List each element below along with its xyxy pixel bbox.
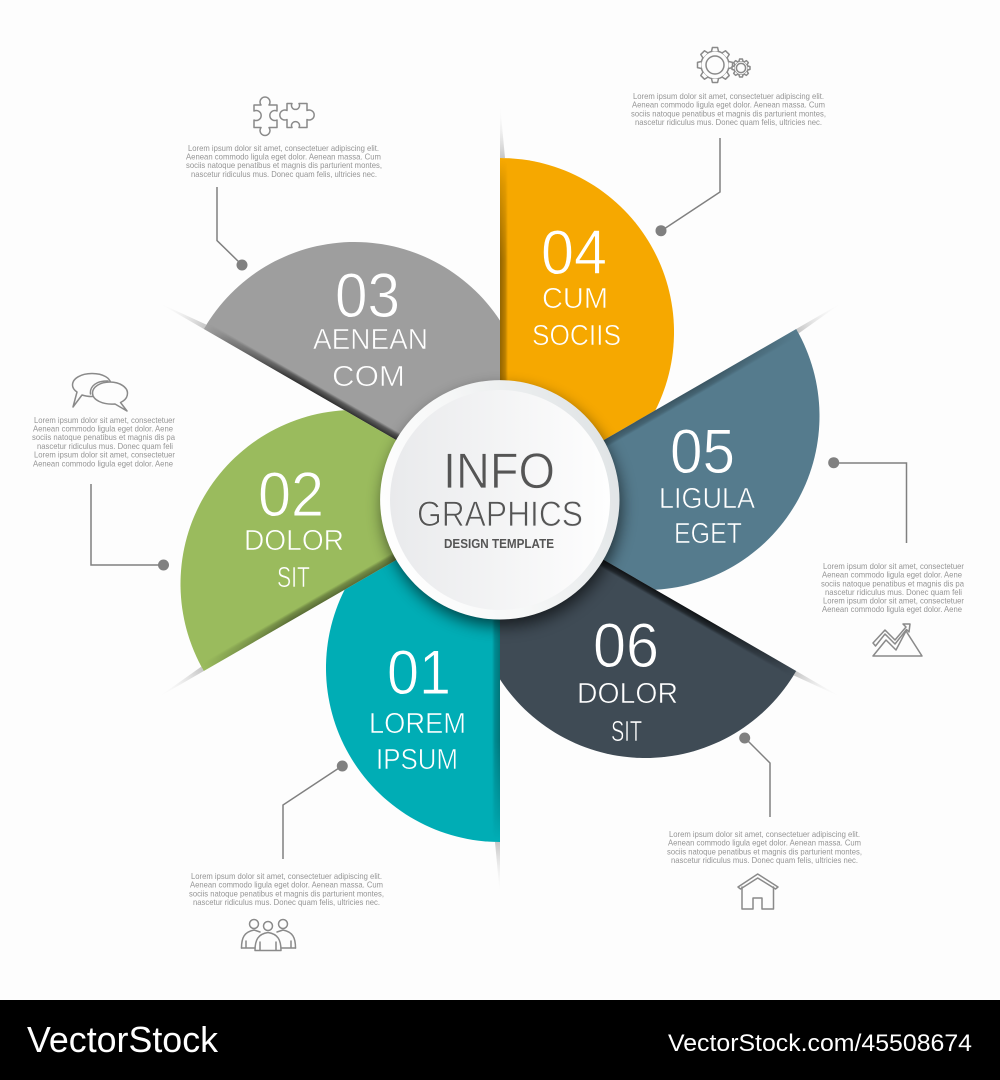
text block 06 bbox=[667, 829, 862, 865]
text block 01: nascetur ridiculus mus. Donec quam felis, ultricies nec. bbox=[193, 897, 380, 907]
icon: puzzle pieces bbox=[254, 97, 314, 136]
text block 02: Aenean commodo ligula eget dolor. Aene bbox=[33, 424, 173, 434]
text block 01: Lorem ipsum dolor sit amet, consectetuer adipiscing elit. bbox=[191, 871, 382, 881]
label: LIGULA EGET bbox=[659, 483, 756, 550]
panel 06: dark petal bbox=[500, 560, 824, 758]
text block 06: Lorem ipsum dolor sit amet, consectetuer adipiscing elit. bbox=[669, 829, 860, 839]
text block 03: Lorem ipsum dolor sit amet, consectetuer adipiscing elit. bbox=[188, 143, 379, 153]
title: INFO GRAPHICS: GRAPHICS bbox=[417, 495, 583, 534]
label: DOLOR SIT: SIT bbox=[611, 716, 642, 748]
text block 01: sociis natoque penatibus et magnis dis parturient montes, bbox=[189, 888, 384, 898]
panel 01: teal petal bbox=[326, 560, 500, 875]
text block 02: Aenean commodo ligula eget dolor. Aene bbox=[33, 458, 173, 468]
text block 04: nascetur ridiculus mus. Donec quam felis, ultricies nec. bbox=[635, 117, 822, 127]
text block 05 bbox=[821, 561, 964, 614]
leader line 01 bbox=[283, 760, 348, 859]
label: LIGULA EGET: EGET bbox=[674, 518, 742, 550]
label: AENEAN COM: COM bbox=[332, 361, 405, 393]
centre circle bbox=[380, 380, 621, 626]
leader line 06 bbox=[739, 732, 770, 817]
label: DOLOR SIT: DOLOR bbox=[577, 678, 678, 710]
number 02: 02 bbox=[258, 460, 324, 530]
label: CUM SOCIIS bbox=[532, 283, 621, 352]
text block 01: Aenean commodo ligula eget dolor. Aenean massa. Cum bbox=[190, 880, 383, 890]
icon: speech bubbles bbox=[72, 374, 128, 411]
text block 01 bbox=[189, 871, 384, 907]
number 01: 01 bbox=[387, 638, 451, 708]
text block 03 bbox=[186, 143, 382, 179]
label: LOREM IPSUM: LOREM bbox=[369, 708, 466, 740]
title: INFO GRAPHICS bbox=[417, 443, 583, 534]
icon: rising chart bbox=[873, 624, 922, 656]
label: AENEAN COM: AENEAN bbox=[313, 324, 428, 356]
number 05: 05 bbox=[670, 417, 735, 487]
icon: gears bbox=[698, 48, 750, 82]
leader line 02 bbox=[91, 484, 169, 570]
text block 02: nascetur ridiculus mus. Donec quam feli bbox=[37, 441, 173, 451]
subtitle: DESIGN TEMPLATE bbox=[444, 536, 554, 551]
text block 05: Aenean commodo ligula eget dolor. Aene bbox=[822, 604, 962, 614]
label: DOLOR SIT bbox=[577, 678, 678, 748]
label: LOREM IPSUM bbox=[369, 708, 466, 776]
panel 03: grey petal bbox=[176, 242, 500, 440]
text block 02 bbox=[32, 415, 175, 468]
text block 03: sociis natoque penatibus et magnis dis parturient montes, bbox=[186, 160, 382, 170]
text block 02: Lorem ipsum dolor sit amet, consectetuer bbox=[34, 415, 175, 425]
icon: group of people bbox=[242, 920, 296, 950]
footer image id: VectorStock.com/45508674 bbox=[668, 1030, 972, 1057]
number 03: 03 bbox=[335, 261, 400, 331]
text block 06: Aenean commodo ligula eget dolor. Aenean massa. Cum bbox=[668, 838, 861, 848]
leader line 03 bbox=[217, 187, 248, 270]
text block 06: nascetur ridiculus mus. Donec quam felis, ultricies nec. bbox=[671, 855, 858, 865]
panel 02: green petal bbox=[174, 410, 396, 687]
label: DOLOR SIT bbox=[244, 525, 344, 594]
text block 03: nascetur ridiculus mus. Donec quam felis, ultricies nec. bbox=[191, 169, 377, 179]
text block 05: Aenean commodo ligula eget dolor. Aene bbox=[822, 570, 962, 580]
leader line 05 bbox=[828, 457, 906, 543]
label: DOLOR SIT: SIT bbox=[277, 562, 310, 594]
panel 04: orange petal bbox=[500, 125, 674, 440]
label: LOREM IPSUM: IPSUM bbox=[376, 744, 458, 776]
label: CUM SOCIIS: CUM bbox=[542, 283, 608, 315]
title: INFO GRAPHICS: INFO bbox=[443, 443, 555, 499]
label: LIGULA EGET: LIGULA bbox=[659, 483, 756, 515]
text block 05: Lorem ipsum dolor sit amet, consectetuer bbox=[823, 561, 964, 571]
footer bar bbox=[0, 1000, 1000, 1080]
text block 02: Lorem ipsum dolor sit amet, consectetuer bbox=[34, 450, 175, 460]
number 04: 04 bbox=[541, 218, 607, 288]
label: CUM SOCIIS: SOCIIS bbox=[532, 320, 621, 352]
text block 03: Aenean commodo ligula eget dolor. Aenean massa. Cum bbox=[186, 152, 381, 162]
icon: house bbox=[738, 874, 778, 909]
text block 04: Aenean commodo ligula eget dolor. Aenean massa. Cum bbox=[632, 100, 825, 110]
label: DOLOR SIT: DOLOR bbox=[244, 525, 344, 557]
text block 05: Lorem ipsum dolor sit amet, consectetuer bbox=[823, 596, 964, 606]
panel 05: slate blue petal bbox=[604, 313, 826, 590]
text block 04 bbox=[631, 91, 826, 127]
text block 05: nascetur ridiculus mus. Donec quam feli bbox=[825, 587, 962, 597]
footer brand: VectorStock bbox=[27, 1019, 219, 1060]
text block 02: sociis natoque penatibus et magnis dis pa bbox=[32, 432, 175, 442]
text block 04: Lorem ipsum dolor sit amet, consectetuer adipiscing elit. bbox=[633, 91, 824, 101]
leader line 04 bbox=[656, 138, 720, 236]
label: AENEAN COM bbox=[313, 324, 428, 393]
text block 06: sociis natoque penatibus et magnis dis parturient montes, bbox=[667, 846, 862, 856]
number 06: 06 bbox=[593, 611, 659, 681]
text block 04: sociis natoque penatibus et magnis dis parturient montes, bbox=[631, 108, 826, 118]
text block 05: sociis natoque penatibus et magnis dis pa bbox=[821, 578, 964, 588]
